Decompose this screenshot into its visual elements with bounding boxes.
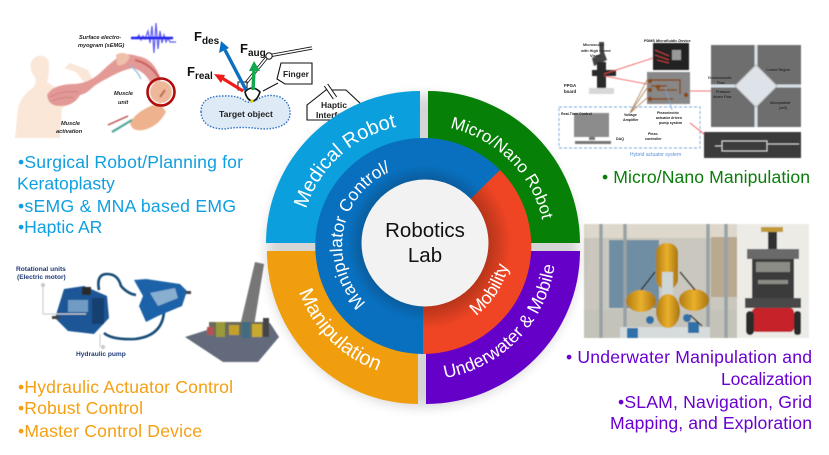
image: hydraulic actuator: Rotational units [16,266,66,273]
text: manipulation topics: •Hydraulic Actuator Control [18,377,233,397]
image: surface EMG and muscle anatomy: activation [56,129,83,135]
text: medical robot topics: •sEMG & MNA based EMG [18,196,236,216]
image: surface EMG and muscle anatomy: Muscle [61,121,80,127]
pump right [134,279,187,322]
red circle marker [148,78,174,106]
image: surface EMG and muscle anatomy [15,23,176,138]
image: micro/nano hybrid actuator system: Microscope [583,43,604,47]
image: surface EMG and muscle anatomy: unit [118,100,129,106]
mobile robot [761,227,783,232]
muscle strands [47,54,161,106]
body silhouette [15,56,94,138]
image: micro/nano hybrid actuator system: DAQ [616,137,624,141]
mid ring: Manipulator Control [315,138,500,354]
center hub [362,180,488,306]
image: micro/nano hybrid actuator system: Amplifier [623,118,639,122]
image: micro/nano hybrid actuator system: controller [645,137,662,141]
haptic interface box [307,90,362,120]
mid ring: Mobility [423,170,532,354]
finger box [277,63,312,84]
quadrant: Medical Robot: Medical Robot [294,114,396,208]
center hub: Lab [408,244,442,267]
image: micro/nano hybrid actuator system [559,39,801,158]
drop shadow [267,95,579,407]
text: medical robot topics: Keratoplasty [17,174,115,194]
mid ring: Manipulator Control: Manipulator Control/ [330,160,388,310]
quadrant: Micro/Nano Robot: Micro/Nano Robot [451,116,552,220]
target object [201,95,290,129]
diagram: haptic force augmentation: Finger [283,69,310,79]
diagram: haptic force augmentation: des [202,36,220,47]
mechanical device model [185,323,279,362]
image: surface EMG and muscle anatomy: myogram (sEMG) [78,43,124,49]
pump left [55,286,109,334]
microchannel view [711,45,801,127]
image: micro/nano hybrid actuator system: with High Speed [580,49,611,53]
text: micro/nano topics: • Micro/Nano Manipulation [602,167,810,187]
quadrant: Underwater & Mobile [426,251,580,404]
dashed system box [559,107,700,148]
text: manipulation topics: •Master Control Device [18,421,202,441]
mid ring: Mobility: Mobility [469,263,510,316]
text: manipulation topics: •Robust Control [18,398,143,418]
text: medical robot topics: •Haptic AR [18,217,102,237]
quadrant: Manipulation [267,251,418,404]
callout lines [43,284,100,347]
hoses [98,274,164,339]
image: micro/nano hybrid actuator system: Piezoelectric [657,111,679,115]
image: underwater robot and mobile robot photos [584,224,809,338]
image: hydraulic actuator [16,262,279,362]
image: micro/nano hybrid actuator system: Voltage [624,113,637,117]
force arrows [225,50,246,90]
image: micro/nano hybrid actuator system: driven Flow [713,95,732,99]
sEMG waveform [131,23,176,53]
image: surface EMG and muscle anatomy: Muscle [114,91,133,97]
diagram: haptic force augmentation [187,29,362,129]
image: micro/nano hybrid actuator system: Real-Time Control [561,112,592,116]
text: underwater and mobile topics: •SLAM, Navigation, Grid [618,392,812,412]
image: micro/nano hybrid actuator system: (cell) [779,106,787,110]
diagram: haptic force augmentation: F [240,41,248,56]
diagram: haptic force augmentation: F [194,29,202,44]
image: hydraulic actuator: Hydraulic pump [76,351,126,358]
image: micro/nano hybrid actuator system: Flow [717,81,725,85]
text: manipulation topics [18,377,233,441]
text: medical robot topics: •Surgical Robot/Planning for [18,152,243,172]
quadrant: Manipulation: Manipulation [299,288,380,370]
quadrant: Micro/Nano Robot [428,91,580,243]
image: micro/nano hybrid actuator system: FPGA [564,83,577,88]
connection lines [604,58,711,134]
image: micro/nano hybrid actuator system: Piezo. [648,132,658,136]
quadrant: Underwater & Mobile: Underwater & Mobile [444,265,554,378]
image: micro/nano hybrid actuator system: pump system [659,121,682,125]
diagram: haptic force augmentation: F [187,64,195,79]
text: underwater and mobile topics: Mapping, and Exploration [610,413,812,433]
text: underwater and mobile topics: • Underwater Manipulation and [566,347,812,367]
text: underwater and mobile topics: Localization [721,369,812,389]
image: micro/nano hybrid actuator system: Microparticle [770,101,790,105]
quadrant: Medical Robot [266,91,420,243]
image: micro/nano hybrid actuator system: Vision [590,54,602,58]
image: micro/nano hybrid actuator system: board [564,89,577,94]
image: surface EMG and muscle anatomy: Surface electro- [79,35,121,41]
muscle unit cylinder [130,103,166,130]
image: micro/nano hybrid actuator system: Electroosmotic [708,76,732,80]
monitor [574,113,609,137]
image: micro/nano hybrid actuator system: PDMS Microfluidic Device [644,39,691,43]
diagram: haptic force augmentation: Interface [316,110,352,120]
diagram: haptic force augmentation: aug [248,48,266,59]
haptic linkage [246,48,312,83]
electrode board [647,72,690,104]
underwater robot [656,243,678,289]
text: underwater and mobile topics [566,347,812,433]
image: hydraulic actuator: (Electric motor) [17,274,66,281]
image: micro/nano hybrid actuator system: Hybrid actuator system [630,152,681,158]
image: micro/nano hybrid actuator system: Control Region [766,68,790,72]
image: micro/nano hybrid actuator system: Pressure [716,90,730,94]
diagram: haptic force augmentation: Target object [219,109,273,119]
PDMS device photo [653,43,689,70]
diagram: haptic force augmentation: real [195,71,213,82]
syringe photo [704,132,801,158]
microscope [592,42,607,66]
image: micro/nano hybrid actuator system: actuator driven [656,116,682,120]
center hub: Robotics [385,219,465,242]
text: medical robot topics [17,152,243,237]
circular diagram [262,90,584,412]
diagram: haptic force augmentation: Haptic [321,100,347,110]
